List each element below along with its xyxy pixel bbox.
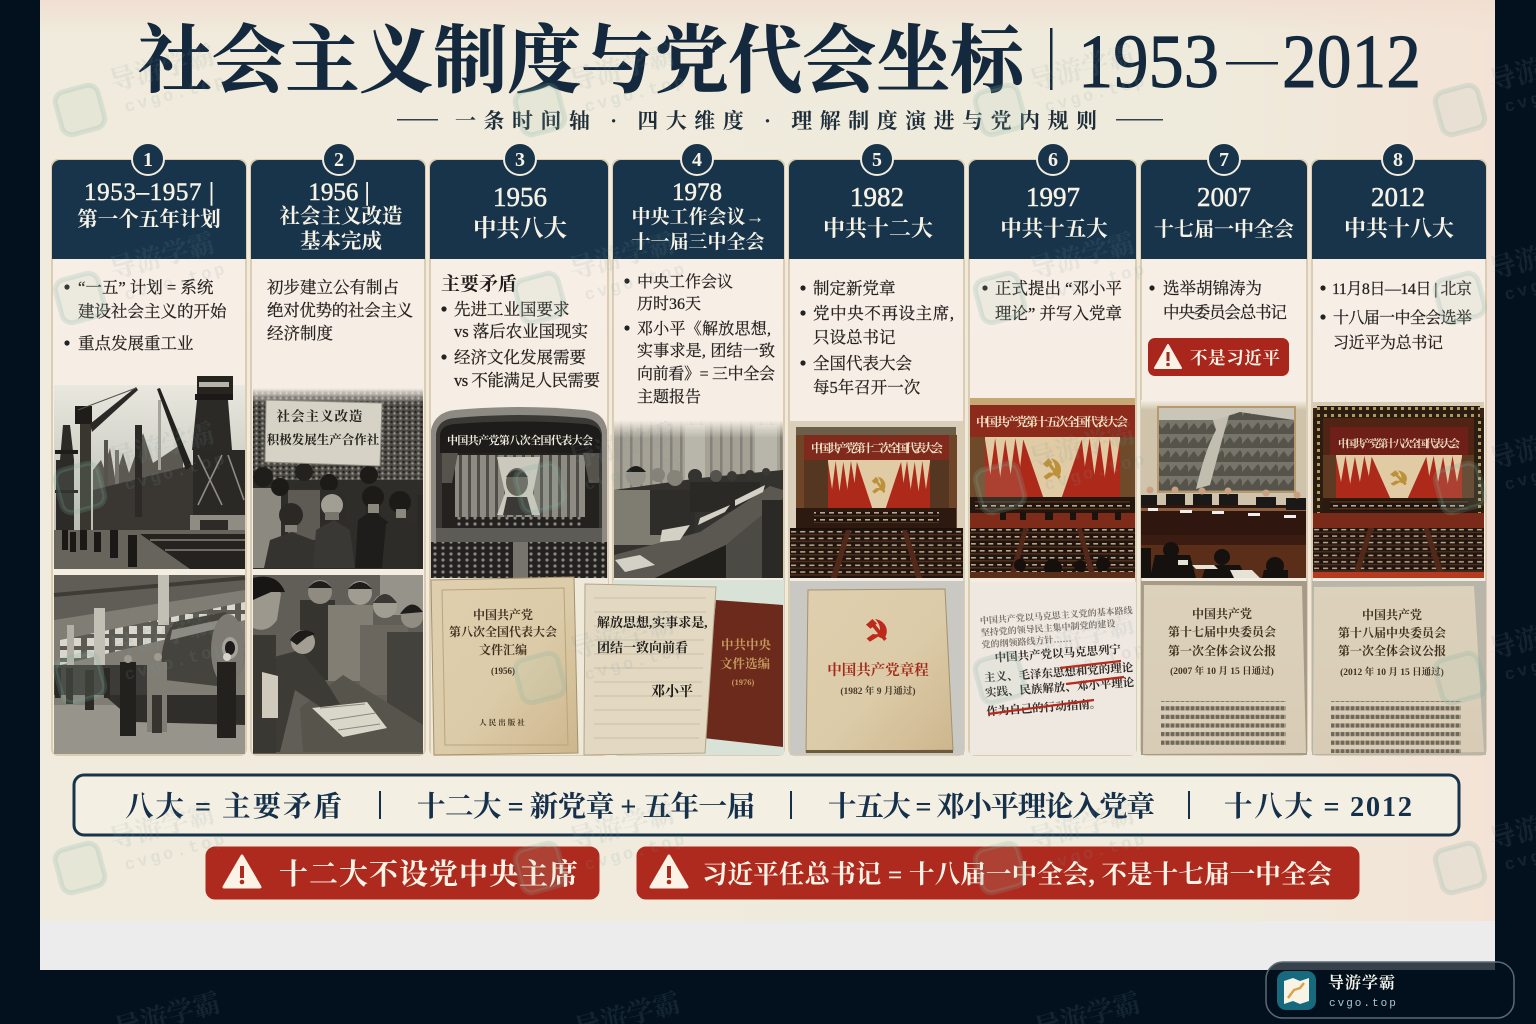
document: constitution text with red underline (970, 582, 1137, 755)
document: eighth congress papers: (1956) (491, 666, 515, 676)
document: eighth congress papers: 文件汇编 (479, 642, 527, 657)
header 3: 中共八大 (473, 215, 567, 242)
warning pill: not Xi Jinping (1148, 338, 1289, 376)
number badge 4: 4 (692, 149, 702, 171)
document: constitution text with red underline: 作为自己的行动指南。 (986, 697, 1102, 719)
document: constitution text with red underline: 主义、毛泽东思想和党的理论 (984, 660, 1134, 685)
photo: fifteenth congress hall (970, 398, 1135, 578)
watermarks: 导游学霸 (1026, 608, 1138, 665)
photo: eighth congress hall (431, 407, 607, 578)
number badge 1 (132, 143, 164, 175)
watermarks: 导游学霸 (566, 40, 678, 97)
header 7 (1141, 160, 1307, 259)
text 3: vs 不能满足人民需要 (454, 371, 600, 390)
document: handwriting and red book (584, 580, 784, 755)
number badge 4 (681, 143, 713, 175)
notebook page: 团结一致向前看 (597, 640, 688, 655)
text 1 (64, 278, 227, 353)
text 7: 选举胡锦涛为 (1163, 279, 1262, 298)
warning pill: not Xi Jinping: 不是习近平 (1190, 348, 1280, 368)
header 5 (789, 160, 964, 259)
summary bar: 十八大 = 2012 (1224, 791, 1412, 823)
watermarks: cvgo.top (583, 450, 690, 496)
document: constitution text with red underline: 实践、民族解放、邓小平理论 (985, 675, 1135, 700)
banner sign (265, 400, 382, 466)
header 1: 第一个五年计划 (77, 207, 221, 231)
text 3: 先进工业国要求 (454, 300, 570, 319)
brand badge: cvgo.top (1329, 998, 1398, 1010)
header 4 (613, 160, 784, 259)
text 6 (982, 279, 1122, 323)
watermarks: 导游学霸 (1026, 40, 1138, 97)
document: 18th plenum communique: 第一次全体会议公报 (1338, 643, 1446, 658)
header 3: 1956 (493, 182, 547, 212)
watermarks: 导游学霸 (106, 40, 218, 97)
panel 2: socialist transformation (251, 143, 425, 755)
document: 18th plenum communique: (2012 年 10 月 15 日通过) (1340, 666, 1444, 678)
text 4: 邓小平《解放思想, (637, 319, 771, 338)
document: constitution text with red underline: 中国共产党以马克思列宁 (994, 642, 1122, 665)
watermarks: cvgo.top (123, 640, 230, 686)
watermarks: 导游学霸 (566, 418, 678, 475)
number badge 5 (861, 143, 893, 175)
warning: Xi Jinping elected at 18th first plenum: 习近平任总书记 = 十八届一中全会, 不是十七届一中全会 (702, 860, 1332, 889)
header 4: 1978 (672, 179, 722, 206)
document: party constitution (790, 581, 964, 755)
header 7: 2007 (1197, 182, 1251, 212)
number badge 8: 8 (1393, 149, 1403, 171)
text 1: “一五” 计划 = 系统 (78, 278, 214, 297)
header 7: 十七届一中全会 (1154, 218, 1294, 241)
summary bar (74, 775, 1459, 835)
summary bar: 十五大 = 邓小平理论入党章 (828, 790, 1155, 823)
header 8 (1312, 160, 1486, 259)
watermarks: cvgo.top (1043, 450, 1150, 496)
text 5: 只设总书记 (813, 328, 896, 347)
document: 17th plenum communique: 第十七届中央委员会 (1168, 624, 1276, 639)
document: 17th plenum communique: 第一次全体会议公报 (1168, 643, 1276, 658)
brand badge (1266, 962, 1514, 1018)
document: constitution text with red underline: 中国共产党以马克思主义党的基本路线 (979, 604, 1133, 626)
text 4: 中央工作会议 (637, 273, 733, 291)
header 3 (430, 160, 608, 259)
banner sign: 积极发展生产合作社 (267, 432, 380, 447)
header 2 (251, 160, 425, 259)
red book: (1976) (732, 677, 754, 687)
watermarks: cvgo.top (123, 450, 230, 496)
watermarks: 导游学霸 (106, 608, 218, 665)
text 5: 每5年召开一次 (813, 377, 920, 397)
document: 17th plenum communique (1141, 581, 1307, 755)
document: 18th plenum communique: 中国共产党 (1362, 607, 1422, 622)
watermarks: 导游学霸 (1026, 418, 1138, 475)
title: 2012 (1282, 20, 1421, 104)
number badge 7: 7 (1219, 149, 1229, 171)
document: eighth congress papers (431, 577, 608, 755)
document: 17th plenum communique: 中国共产党 (1192, 606, 1252, 621)
watermarks: 导游学霸 (106, 798, 218, 855)
number badge 2: 2 (334, 149, 344, 171)
header 8: 中共十八大 (1344, 216, 1454, 241)
watermarks: 导游学霸 (566, 608, 678, 665)
text 5 (800, 278, 954, 397)
document: party constitution: (1982 年 9 月通过) (840, 685, 916, 697)
summary bar: 八大 = 主要矛盾 (125, 791, 342, 823)
text 4: 向前看》= 三中全会 (637, 365, 775, 383)
red book (703, 600, 783, 747)
summary bar: 十二大 = 新党章 + 五年一届 (417, 790, 755, 823)
text 7 (1149, 279, 1287, 322)
text 2: 经济制度 (267, 324, 333, 343)
warning: no party chairman at twelfth congress: 十二大不设党中央主席 (279, 858, 578, 891)
header 2: 基本完成 (300, 229, 382, 253)
photo: workers with documents (253, 575, 423, 754)
text 5: 制定新党章 (813, 278, 896, 298)
text 1: 建设社会主义的开始 (78, 302, 227, 321)
text 1: 重点发展重工业 (78, 334, 194, 353)
watermarks: cvgo.top (1043, 72, 1150, 118)
photo: plenum rostrum with landscape painting (1141, 400, 1306, 578)
header 5: 中共十二大 (823, 216, 933, 241)
document: 17th plenum communique: (2007 年 10 月 15 日通过) (1170, 665, 1274, 677)
header 2: 1956 | (308, 179, 370, 206)
header 6 (969, 160, 1136, 259)
watermarks: cvgo.top (1043, 640, 1150, 686)
text 5: 全国代表大会 (813, 354, 912, 373)
document: 18th plenum communique: 第十八届中央委员会 (1338, 625, 1446, 640)
text 4 (624, 273, 775, 406)
text 8: 11月8日—14日 | 北京 (1332, 280, 1472, 298)
document: eighth congress papers: 中国共产党 (473, 607, 533, 622)
icon: map (1277, 971, 1316, 1010)
text 2 (267, 278, 413, 343)
document: eighth congress papers: 人民出版社 (479, 717, 527, 727)
header 1: 1953–1957 | (84, 179, 214, 206)
watermarks: 导游学霸 (106, 418, 218, 475)
watermarks: cvgo.top (123, 72, 230, 118)
watermarks: 导游学霸 (566, 798, 678, 855)
document: constitution text with red underline: 坚持党的领导民主集中制党的建设 (980, 617, 1116, 638)
header 6: 1997 (1026, 182, 1080, 212)
photo: eighteenth congress hall (1313, 402, 1484, 578)
text 2: 绝对优势的社会主义 (267, 301, 413, 320)
watermarks: cvgo.top (1043, 830, 1150, 876)
header 1 (52, 160, 246, 259)
number badge 3: 3 (515, 149, 525, 171)
text 3: 经济文化发展需要 (454, 348, 586, 367)
panel 3: eighth congress (430, 143, 608, 755)
text 3 (441, 273, 600, 390)
panel 4: third plenum (584, 143, 784, 755)
number badge 7 (1208, 143, 1240, 175)
document: eighth congress papers: 第八次全国代表大会 (449, 624, 557, 639)
photo: steel construction site (54, 376, 245, 569)
watermarks: 导游学霸 (106, 228, 218, 285)
number badge 6: 6 (1048, 149, 1058, 171)
banner sign: 社会主义改造 (276, 408, 364, 424)
panel 8: eighteenth congress (1312, 143, 1486, 755)
number badge 5: 5 (872, 149, 882, 171)
photo: crowd with banner (253, 388, 423, 569)
document: party constitution: 中国共产党章程 (827, 661, 929, 679)
subtitle: 一条时间轴 · 四大维度 · 理解制度演进与党内规则 (455, 109, 1097, 133)
panel 5: twelfth congress (789, 143, 964, 755)
warning: Xi Jinping elected at 18th first plenum (636, 846, 1360, 900)
number badge 3 (504, 143, 536, 175)
header 5: 1982 (850, 182, 904, 212)
text 5: 党中央不再设主席, (813, 304, 954, 323)
panel 1: first five-year plan (52, 143, 246, 755)
text 3: 主要矛盾 (441, 273, 517, 295)
panel 6: fifteenth congress (969, 143, 1137, 755)
watermarks: 导游学霸 (1026, 798, 1138, 855)
number badge 8 (1382, 143, 1414, 175)
red book: 文件选编 (720, 656, 770, 671)
watermarks: cvgo.top (1043, 260, 1150, 306)
text 4: 历时36天 (637, 295, 701, 313)
watermarks: cvgo.top (583, 830, 690, 876)
text 6: 理论” 并写入党章 (995, 303, 1122, 323)
panel 7: first plenum of 17th central committee (1141, 143, 1307, 755)
number badge 1: 1 (143, 149, 153, 171)
watermarks: cvgo.top (583, 640, 690, 686)
header 8: 2012 (1371, 182, 1425, 212)
notebook page: 解放思想,实事求是, (597, 615, 708, 630)
photo: eighteenth congress hall: 中国共产党第十八次全国代表大会 (1338, 437, 1460, 450)
text 7: 中央委员会总书记 (1163, 303, 1287, 322)
brand badge: 导游学霸 (1328, 974, 1396, 992)
photo: twelfth congress hall: 中国共产党第十二次全国代表大会 (811, 441, 944, 455)
header 6: 中共十五大 (1000, 217, 1108, 241)
watermarks: 导游学霸 (1026, 228, 1138, 285)
number badge 6 (1037, 143, 1069, 175)
warning: no party chairman at twelfth congress (205, 846, 600, 900)
watermarks: 导游学霸 (566, 228, 678, 285)
notebook page (584, 584, 716, 755)
photo: work conference meeting (614, 420, 783, 578)
number badge 2 (323, 143, 355, 175)
title: 1953 (1078, 20, 1219, 104)
photo: eighth congress hall: 中国共产党第八次全国代表大会 (447, 433, 593, 447)
watermarks: cvgo.top (123, 260, 230, 306)
text 3: vs 落后农业国现实 (454, 322, 588, 341)
marching figures (253, 463, 423, 569)
header 2: 社会主义改造 (280, 205, 402, 228)
text 8: 习近平为总书记 (1333, 334, 1443, 352)
photo: fifteenth congress hall: 中国共产党第十五次全国代表大会 (976, 414, 1128, 429)
watermarks: cvgo.top (123, 830, 230, 876)
watermarks: cvgo.top (583, 260, 690, 306)
text 2: 初步建立公有制占 (267, 278, 399, 297)
document: 18th plenum communique (1312, 581, 1486, 755)
watermarks: cvgo.top (583, 72, 690, 118)
title: 社会主义制度与党代会坐标 (138, 21, 1030, 103)
text 4: 实事求是, 团结一致 (637, 342, 775, 360)
title (138, 20, 1421, 104)
text 4: 主题报告 (637, 387, 701, 406)
photo: twelfth congress hall (790, 421, 963, 578)
text 6: 正式提出 “邓小平 (995, 279, 1122, 298)
text 8: 十八届一中全会选举 (1333, 309, 1472, 327)
text 8 (1320, 280, 1472, 352)
header 4: 中央工作会议→ (631, 206, 765, 228)
red book: 中共中央 (721, 637, 771, 652)
header 4: 十一届三中全会 (631, 231, 765, 253)
document: constitution text with red underline: 党的纲领路线方针…… (981, 633, 1072, 650)
photo: factory floor (54, 575, 245, 754)
notebook page: 邓小平 (651, 683, 693, 700)
